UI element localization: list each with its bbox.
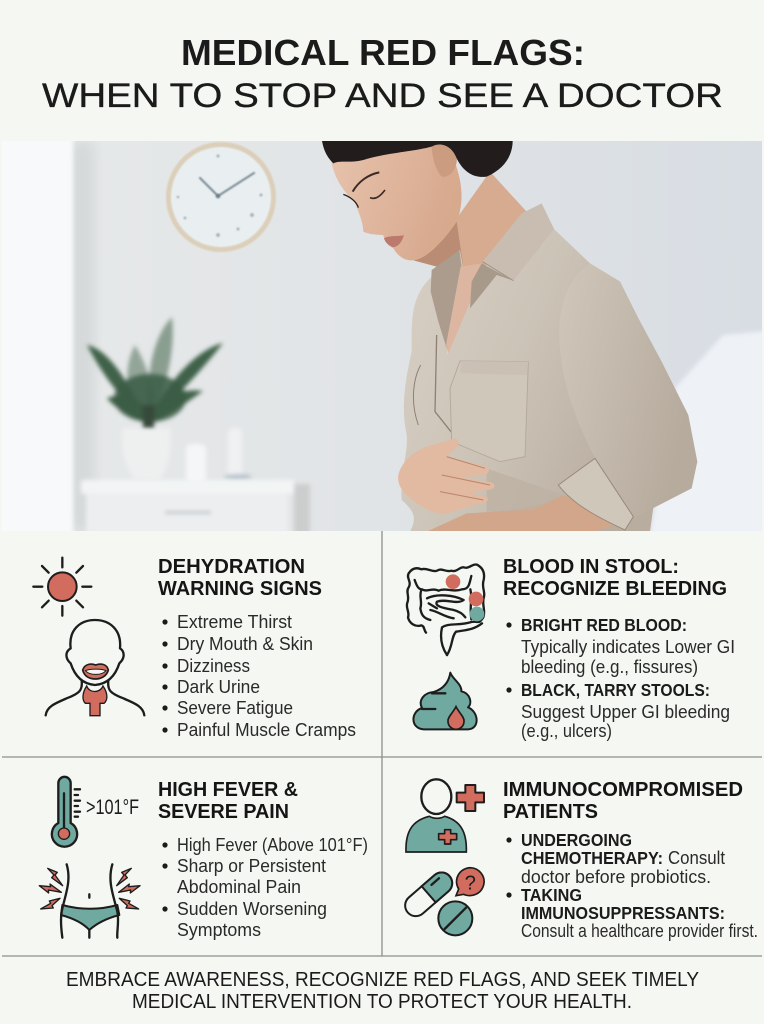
face: [332, 145, 462, 260]
section dividers: [2, 531, 762, 956]
icon: thermometer: [52, 777, 80, 847]
symptom list: Painful Muscle Cramps: [177, 720, 356, 740]
symptom list: Dizziness: [177, 656, 250, 676]
bleeding descriptions: Suggest Upper GI bleeding: [521, 702, 730, 722]
heading: DEHYDRATION: [158, 555, 305, 578]
heading: RECOGNIZE BLEEDING: [503, 577, 727, 600]
icon: capsule, tablet and question bubble: [401, 868, 484, 935]
footer message: [66, 969, 699, 1013]
symptom list: Extreme Thirst: [177, 612, 292, 632]
symptom list: Dark Urine: [177, 677, 260, 697]
curtain: [0, 135, 73, 537]
shirt hem shadow: [486, 470, 557, 512]
bleeding descriptions: (e.g., ulcers): [521, 721, 612, 741]
symptom list: Abdominal Pain: [177, 877, 301, 897]
patient guidance: CHEMOTHERAPY:: [521, 848, 663, 868]
icon: abdomen with pain bolts: [39, 864, 140, 938]
heading: PATIENTS: [503, 800, 598, 823]
heading: IMMUNOCOMPROMISED: [503, 778, 743, 801]
patient guidance: IMMUNOSUPPRESSANTS:: [521, 903, 725, 923]
symptom list: Symptoms: [177, 920, 261, 940]
potted plant: [87, 317, 223, 430]
panel: blood in stool: [407, 555, 735, 741]
heading: [158, 778, 298, 823]
patient guidance: TAKING: [521, 885, 582, 905]
symptom list: Severe Fatigue: [177, 698, 293, 718]
patient guidance: UNDERGOING: [521, 830, 632, 850]
rolled cuff: [558, 458, 633, 530]
hair: [322, 138, 513, 177]
patient guidance: Consult: [668, 848, 725, 868]
pocket: [450, 361, 528, 462]
sleeve: [590, 264, 698, 508]
panel: high fever and severe pain: [39, 777, 368, 940]
panel: dehydration warning signs: [33, 555, 356, 740]
icon: head with dry mouth and throat: [46, 620, 144, 716]
neck and chest: [434, 174, 526, 266]
icon: sun: [33, 558, 91, 616]
footer message: MEDICAL INTERVENTION TO PROTECT YOUR HEALTH.: [132, 991, 632, 1013]
heading: HIGH FEVER &: [158, 778, 298, 801]
heading: WARNING SIGNS: [158, 577, 322, 600]
brow, eye, lips: [353, 172, 379, 192]
panel: immunocompromised patients: [401, 778, 758, 941]
pot and ornaments: [122, 428, 252, 484]
title: [42, 32, 723, 115]
photo: woman holding her abdomen in a bright room: [0, 135, 764, 537]
heading: [503, 555, 727, 600]
symptom list: Sharp or Persistent: [177, 856, 326, 876]
hand: [398, 438, 494, 514]
bleeding descriptions: [506, 615, 735, 741]
symptom list: [162, 835, 368, 940]
forearm: [427, 495, 620, 532]
footer message: EMBRACE AWARENESS, RECOGNIZE RED FLAGS, AND SEEK TIMELY: [66, 969, 699, 991]
shirt seams: [434, 335, 451, 432]
wall clock: [166, 142, 276, 252]
icon: patient with medical cross: [406, 779, 484, 852]
heading: [158, 555, 322, 600]
side table: [81, 480, 310, 534]
heading: [503, 778, 743, 823]
woman figure: [322, 138, 697, 532]
symptom list: Dry Mouth & Skin: [177, 634, 313, 654]
symptom list: [162, 612, 356, 740]
heading: BLOOD IN STOOL:: [503, 555, 679, 578]
collar: [483, 203, 554, 281]
icon: capsule, tablet and question bubble: ?: [465, 873, 476, 895]
label: temperature threshold: >101°F: [86, 796, 139, 819]
ear: [432, 143, 457, 177]
symptom list: High Fever (Above 101°F): [177, 835, 368, 855]
bleeding descriptions: bleeding (e.g., fissures): [521, 657, 698, 677]
placket shadow: [431, 250, 462, 348]
bleeding descriptions: BLACK, TARRY STOOLS:: [521, 680, 710, 700]
shirt body: [401, 203, 663, 532]
bleeding descriptions: Typically indicates Lower GI: [521, 637, 735, 657]
symptom list: Sudden Worsening: [177, 899, 327, 919]
title: WHEN TO STOP AND SEE A DOCTOR: [42, 77, 723, 115]
heading: SEVERE PAIN: [158, 800, 289, 823]
patient guidance: [506, 830, 758, 941]
bed: [650, 331, 764, 536]
icon: intestines: [407, 564, 484, 655]
jaw shadow: [413, 222, 463, 268]
patient guidance: doctor before probiotics.: [521, 867, 711, 887]
bleeding descriptions: BRIGHT RED BLOOD:: [521, 615, 687, 635]
icon: stool with blood drop: [413, 673, 477, 729]
title: MEDICAL RED FLAGS:: [181, 32, 585, 73]
